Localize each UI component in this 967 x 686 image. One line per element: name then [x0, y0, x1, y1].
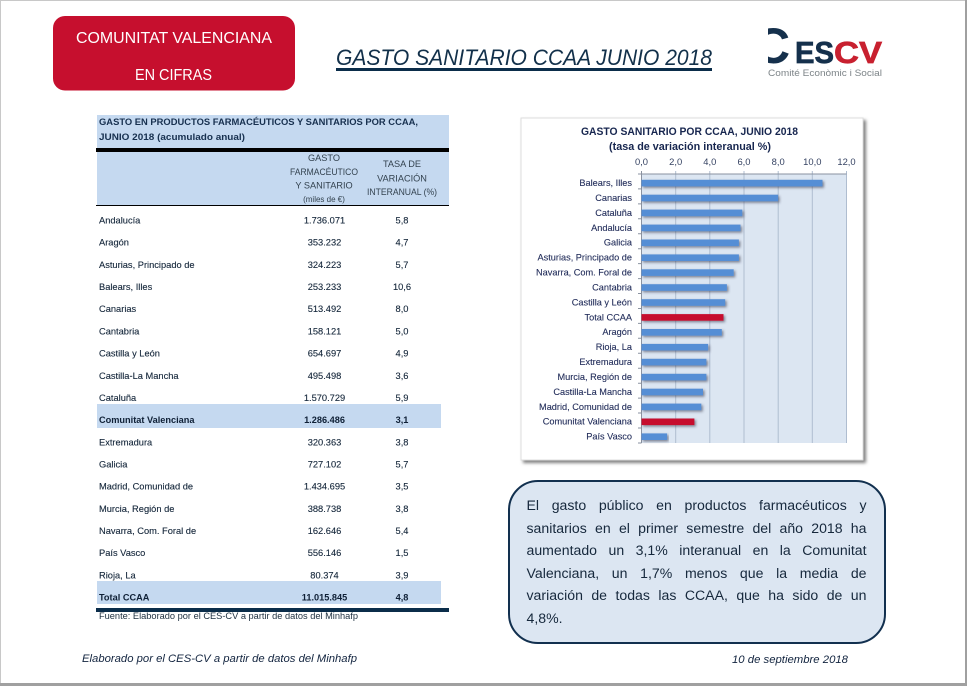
table rows: Navarra, Com. Foral de — [99, 526, 196, 536]
category labels: Madrid, Comunidad de — [539, 402, 632, 412]
table column headers: VARIACIÓN — [377, 174, 427, 184]
category labels: Total CCAA — [585, 312, 633, 322]
logo: CES-CV: ES — [795, 35, 834, 70]
chart title — [581, 126, 798, 153]
table rows: 4,8 — [396, 593, 408, 603]
x axis labels: 2,0 — [669, 156, 682, 167]
table rows: Murcia, Región de — [99, 504, 174, 514]
table rows: 3,6 — [396, 371, 408, 381]
table rows: Cataluña — [99, 393, 137, 403]
category labels: Navarra, Com. Foral de — [536, 268, 632, 278]
table rows: 513.492 — [308, 304, 341, 314]
category labels: Cataluña — [595, 208, 633, 218]
table column headers: Y SANITARIO — [295, 180, 353, 190]
table rows: 253.233 — [308, 282, 341, 292]
table rows: País Vasco — [99, 548, 145, 558]
highlight band: Total CCAA — [97, 581, 441, 604]
table rows: 10,6 — [393, 282, 411, 292]
table rows: Andalucía — [99, 216, 141, 226]
callout: summary text: 4,8%. — [526, 610, 563, 626]
table rows: 5,8 — [396, 216, 408, 226]
category labels: Murcia, Región de — [557, 372, 632, 382]
highlight band: Comunitat Valenciana — [97, 404, 441, 428]
table rows: Asturias, Principado de — [99, 260, 195, 270]
table title: JUNIO 2018 (acumulado anual) — [99, 132, 245, 143]
table rows: 162.646 — [308, 526, 341, 536]
table rows: 3,1 — [396, 415, 408, 425]
table rows: 5,4 — [396, 526, 408, 536]
logo: CES-CV: C — [754, 18, 790, 74]
category labels: Aragón — [602, 327, 632, 337]
footer: date: 10 de septiembre 2018 — [732, 654, 848, 666]
table rows: 158.121 — [308, 326, 341, 336]
category labels: Extremadura — [579, 357, 633, 367]
category labels: Rioja, La — [596, 342, 633, 352]
callout: summary text: aumentado un 3,1% interanual en la Comunitat — [526, 542, 866, 558]
badge: Comunitat Valenciana en cifras: COMUNITAT VALENCIANA — [76, 30, 273, 47]
logo: CES-CV: Comité Econòmic i Social — [768, 68, 882, 79]
category labels: Asturias, Principado de — [538, 253, 632, 263]
table rows: Comunitat Valenciana — [99, 415, 195, 425]
table rows: Total CCAA — [99, 593, 150, 603]
callout: summary text: sanitarios en el primer semestre del año 2018 ha — [526, 520, 866, 536]
x axis labels: 0,0 — [635, 156, 648, 167]
table title — [97, 115, 449, 148]
table rows: 5,7 — [396, 460, 408, 470]
logo: CES-CV: CV — [834, 35, 882, 70]
table rows: 5,7 — [396, 260, 408, 270]
category labels — [536, 178, 633, 442]
table rows: Rioja, La — [99, 570, 137, 580]
table rows: 388.738 — [308, 504, 341, 514]
table rows: 3,8 — [396, 504, 408, 514]
table rows: 495.498 — [308, 371, 341, 381]
table rows: Extremadura — [99, 437, 153, 447]
table rows: Castilla y León — [99, 349, 160, 359]
x axis labels: 6,0 — [737, 156, 751, 167]
table rows: 3,5 — [396, 482, 408, 492]
category labels: Canarias — [595, 193, 632, 203]
callout: summary text — [508, 480, 886, 644]
table rows: 353.232 — [308, 238, 341, 248]
table rows: 727.102 — [308, 460, 341, 470]
panel: data table — [96, 115, 449, 621]
table rows — [99, 216, 411, 603]
x axis labels: 8,0 — [772, 156, 785, 167]
x axis labels: 4,0 — [703, 156, 716, 167]
table rows: Balears, Illes — [99, 282, 153, 292]
table column headers: TASA DE — [383, 159, 421, 169]
table rows: 11.015.845 — [302, 593, 347, 603]
chart title: GASTO SANITARIO POR CCAA, JUNIO 2018 — [581, 126, 798, 138]
table rows: 80.374 — [310, 570, 339, 580]
table rows: 3,9 — [396, 570, 408, 580]
x axis labels: 12,0 — [837, 156, 856, 167]
x axis labels — [635, 156, 856, 167]
table column headers: (miles de €) — [303, 195, 345, 204]
table rows: 5,0 — [396, 326, 408, 336]
table rows: 1,5 — [396, 548, 408, 558]
table rows: Castilla-La Mancha — [99, 371, 179, 381]
table rows: 1.434.695 — [304, 482, 345, 492]
category labels: Cantabria — [592, 282, 633, 292]
x axis labels: 10,0 — [803, 156, 821, 167]
table source note: Fuente: Elaborado por el CES-CV a partir de datos del Minhafp — [99, 611, 358, 621]
table rows: 654.697 — [308, 349, 341, 359]
table rows: Galicia — [99, 460, 128, 470]
category labels: Andalucía — [591, 223, 633, 233]
category labels: Castilla y León — [572, 297, 632, 307]
category labels: País Vasco — [586, 432, 632, 442]
table rows: 320.363 — [308, 437, 341, 447]
table rows: Cantabria — [99, 326, 140, 336]
table column headers: INTERANUAL (%) — [367, 187, 437, 197]
table title: GASTO EN PRODUCTOS FARMACÉUTICOS Y SANITARIOS POR CCAA, — [99, 116, 418, 128]
category labels: Balears, Illes — [579, 178, 632, 188]
callout: summary text: Valenciana, un 1,7% menos que la media de — [526, 564, 866, 580]
chart title: (tasa de variación interanual %) — [609, 141, 771, 153]
footer: source: Elaborado por el CES-CV a partir de datos del Minhafp — [82, 653, 357, 665]
table rows: 5,9 — [396, 393, 408, 403]
table rows: 8,0 — [396, 304, 408, 314]
category labels: Galicia — [604, 238, 633, 248]
table column headers: FARMACÉUTICO — [290, 167, 358, 177]
title: GASTO SANITARIO CCAA JUNIO 2018 — [336, 45, 713, 70]
table column headers — [97, 152, 449, 205]
table rows: 3,8 — [396, 437, 408, 447]
logo: CES-CV — [768, 28, 882, 76]
plot area — [638, 171, 846, 443]
table rows: 4,9 — [396, 349, 408, 359]
table rows: Madrid, Comunidad de — [99, 482, 193, 492]
panel: bar chart — [521, 118, 863, 460]
table rows: 324.223 — [308, 260, 341, 270]
table rows: 4,7 — [396, 238, 408, 248]
table rows: 1.736.071 — [304, 216, 345, 226]
table rows: Aragón — [99, 238, 129, 248]
category labels: Castilla-La Mancha — [553, 387, 633, 397]
callout: summary text: El gasto público en productos farmacéuticos y — [526, 497, 866, 513]
bars — [642, 180, 822, 440]
category labels: Comunitat Valenciana — [543, 417, 633, 427]
table rows: 1.570.729 — [304, 393, 345, 403]
table rows: 556.146 — [308, 548, 341, 558]
callout: summary text: variación de todas las CCAA, que ha sido de un — [526, 587, 866, 603]
badge: Comunitat Valenciana en cifras — [53, 16, 295, 90]
table column headers: GASTO — [308, 153, 340, 163]
badge: Comunitat Valenciana en cifras: EN CIFRAS — [135, 67, 212, 84]
table rows: Canarias — [99, 304, 137, 314]
table rows: 1.286.486 — [304, 415, 345, 425]
